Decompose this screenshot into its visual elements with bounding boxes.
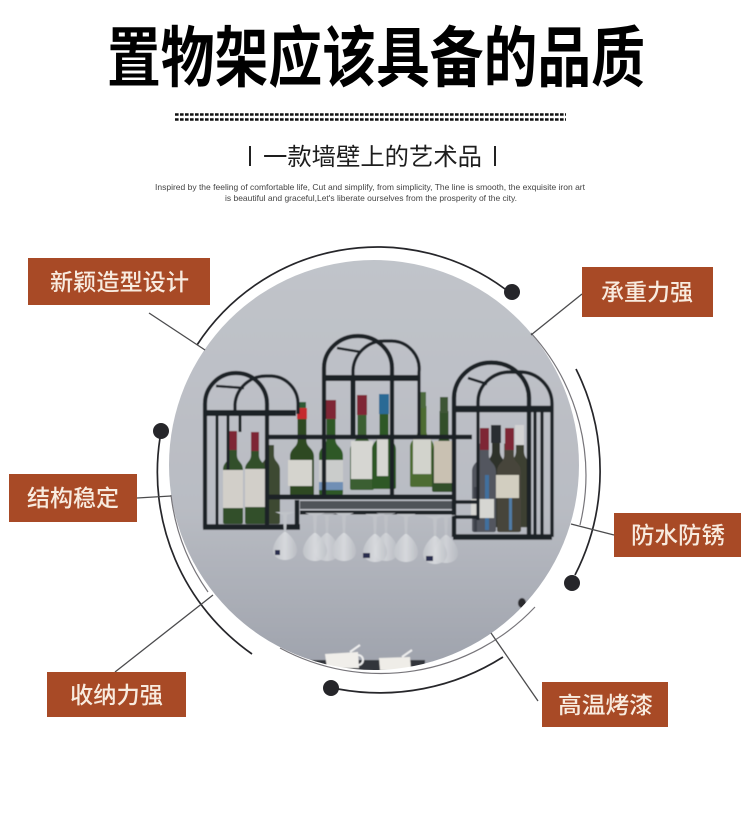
right unit front arch: [454, 363, 529, 537]
table with cups: [310, 644, 426, 670]
wall knob: [518, 598, 526, 608]
callout: 防水防锈: [614, 513, 741, 557]
title: 置物架应该具备的品质: [107, 21, 645, 95]
callout: 高温烤漆: 高温烤漆: [558, 692, 653, 718]
long shelves: [267, 435, 472, 439]
subtitle: 一款墙壁上的艺术品: [263, 144, 482, 171]
wine bottles: middle unit: [288, 392, 456, 496]
callout: 承重力强: [582, 267, 713, 317]
left unit back arch: [235, 376, 298, 414]
middle unit back arch: [353, 341, 419, 438]
decorative orbit: bottom arc with dot: [323, 657, 503, 696]
callout: 结构稳定: [9, 474, 137, 522]
wine rack frame: [203, 336, 552, 537]
wine bottles: right unit: [471, 425, 530, 532]
decorative orbit: left arc with dot: [153, 423, 252, 654]
callout: 承重力强: 承重力强: [601, 279, 693, 305]
callout: 防水防锈: 防水防锈: [631, 522, 725, 548]
callout: 新颖造型设计: [28, 258, 210, 305]
left unit front arch: [205, 373, 267, 528]
wine bottles: left unit: [223, 431, 280, 524]
double dashed divider: [175, 114, 566, 120]
callout: 新颖造型设计: 新颖造型设计: [50, 269, 189, 295]
english description: is beautiful and graceful,Let's liberate ourselves from the prosperity of the city.: [225, 193, 517, 203]
english description: Inspired by the feeling of comfortable life, Cut and simplify, from simplicity, The line is smooth, the exquisite iron art: [155, 182, 586, 192]
thin ring arcs: [171, 333, 586, 674]
middle unit front arch: [324, 336, 392, 498]
decorative orbit: right arc with dot: [564, 369, 600, 591]
callout: 收纳力强: [47, 672, 186, 717]
leader lines: [115, 294, 614, 701]
callout: 高温烤漆: [542, 682, 668, 727]
panel: circular product photo: [160, 250, 590, 680]
hanging wine glasses: [273, 512, 458, 564]
right unit back arch: [478, 372, 552, 537]
callout: 收纳力强: 收纳力强: [70, 682, 163, 708]
wall background: [169, 260, 579, 664]
decorative orbit: top arc with dot: [197, 247, 520, 345]
english description: [155, 182, 586, 203]
callout: 结构稳定: 结构稳定: [27, 485, 119, 511]
